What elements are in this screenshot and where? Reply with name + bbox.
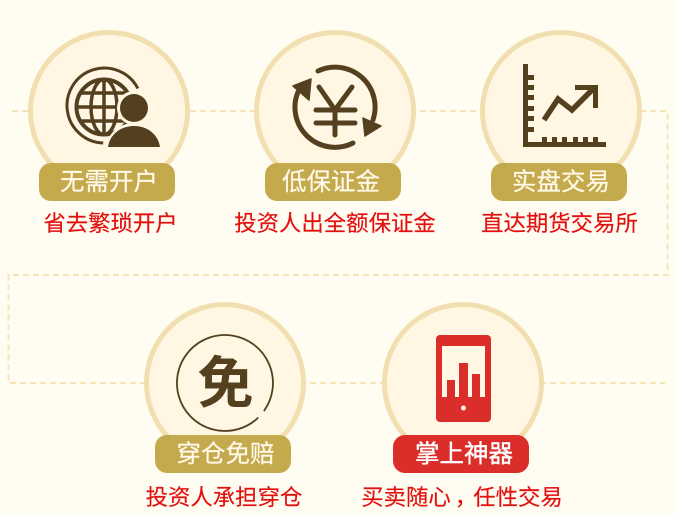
label pill: 实盘交易 (512, 168, 610, 196)
label pill (155, 435, 291, 473)
panel: mobile app (361, 304, 563, 510)
icon: circled 免 (177, 335, 273, 431)
icon: red phone with bar chart (436, 335, 491, 422)
label pill (39, 163, 175, 201)
label pill: 无需开户 (60, 168, 158, 196)
label pill: 低保证金 (282, 168, 380, 196)
label pill (393, 435, 529, 473)
caption: 投资人承担穿仓 (146, 485, 302, 510)
caption: 买卖随心，任性交易 (361, 485, 563, 510)
label pill: 掌上神器 (415, 440, 513, 468)
caption: 投资人出全额保证金 (234, 211, 436, 236)
icon: rising line chart (523, 64, 606, 147)
icon: yuan with circular arrows (293, 67, 381, 147)
icon: globe and person (67, 68, 162, 149)
panel: low margin (234, 32, 436, 236)
caption: 省去繁琐开户 (43, 211, 178, 236)
icon: circled 免: 免 (198, 352, 254, 415)
label pill (491, 163, 627, 201)
caption: 直达期货交易所 (481, 211, 638, 236)
label pill: 穿仓免赔 (176, 440, 274, 468)
panel: no liquidation compensation (146, 304, 304, 510)
label pill (265, 163, 401, 201)
panel: real trading (481, 32, 640, 236)
panel: no account opening (30, 32, 188, 236)
